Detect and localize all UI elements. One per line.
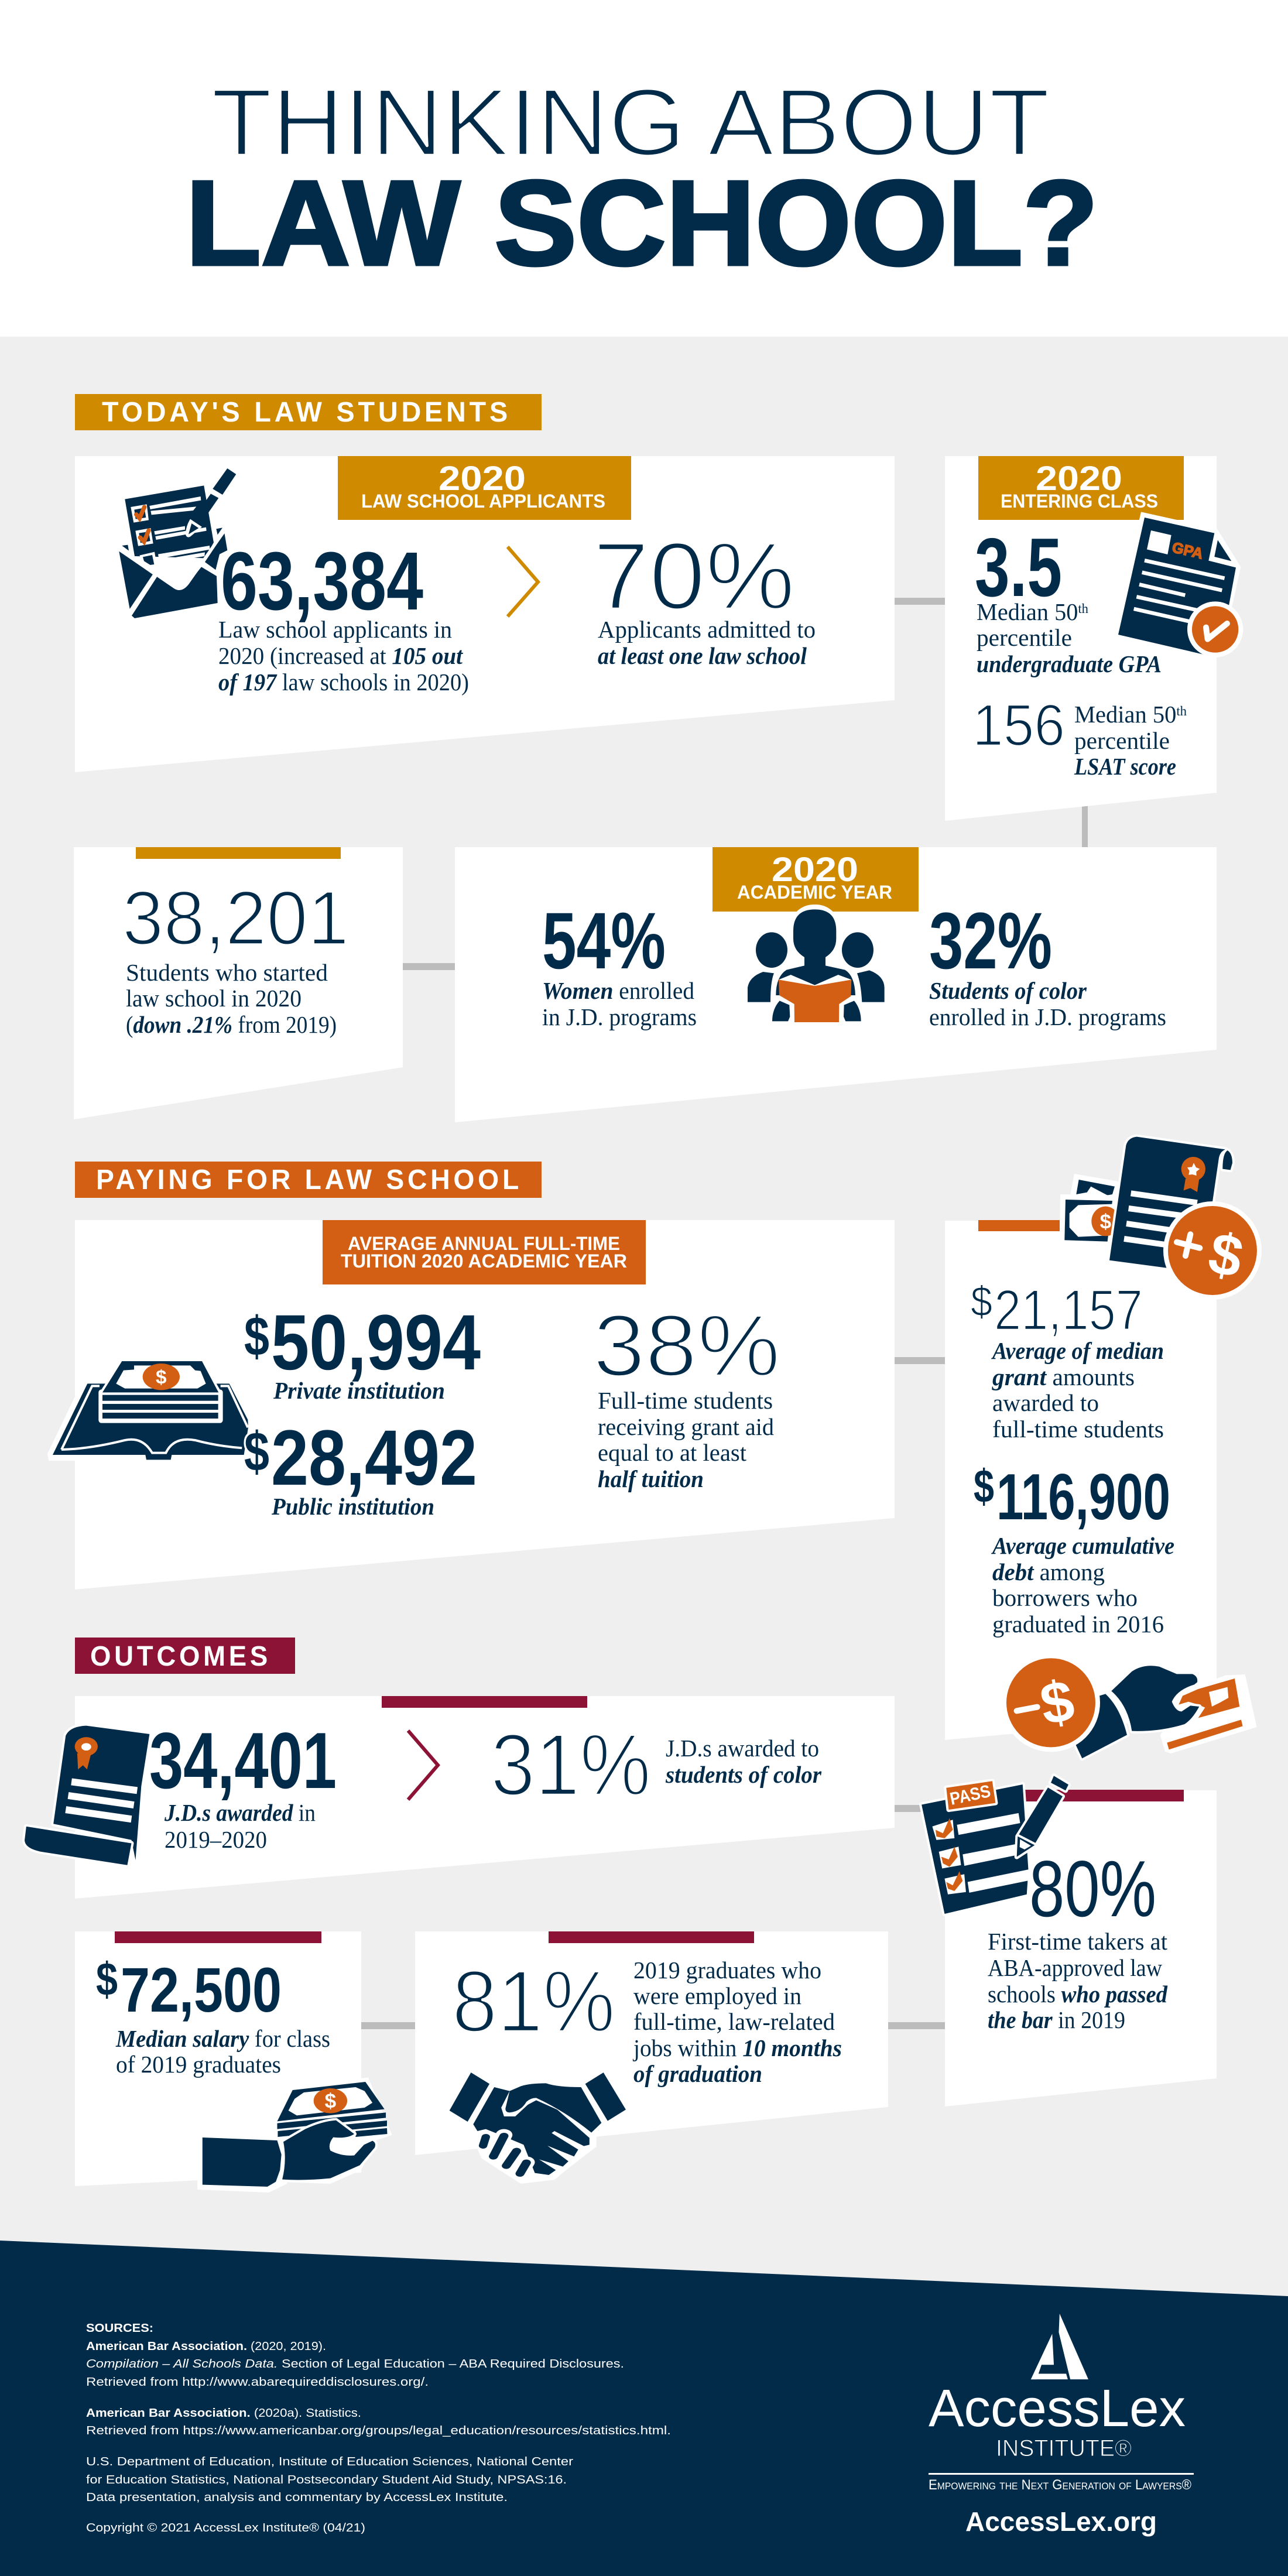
stat: 70% admitted: 70% <box>593 522 795 629</box>
sources text: SOURCES: <box>86 2322 153 2335</box>
panel: average annual tuition: AVERAGE ANNUAL FULL-TIME <box>348 1233 620 1254</box>
stat: 32% students of color <box>929 896 1166 1030</box>
stat: $116,900 debt: debt among <box>992 1558 1105 1585</box>
stat: 156 LSAT: LSAT score <box>1074 753 1176 780</box>
stat: 38% grant aid: receiving grant aid <box>598 1413 774 1440</box>
stat: $21,157 grant <box>971 1278 1164 1443</box>
panel: average annual tuition <box>47 1220 895 1590</box>
arrow: maroon chevron <box>408 1731 438 1800</box>
stat: 34,401 J.D.s: 2019–2020 <box>165 1826 267 1853</box>
sources text: Compilation – All Schools Data. Section of Legal Education – ABA Required Disclosures. <box>86 2358 624 2371</box>
panel: average annual tuition: TUITION 2020 ACADEMIC YEAR <box>341 1251 627 1272</box>
sources text: Retrieved from https://www.americanbar.org/groups/legal_education/resources/statistics.html. <box>86 2424 671 2437</box>
title <box>0 0 1288 337</box>
stat: 63,384 applicants: Law school applicants in <box>218 616 452 643</box>
stat: $21,157 grant: Average of median <box>991 1337 1164 1364</box>
title: THINKING ABOUT <box>211 68 1050 176</box>
stat: 80% passed: 80% <box>1029 1844 1156 1933</box>
stat: 54% women <box>542 896 697 1030</box>
sources text: Retrieved from http://www.abarequireddisclosures.org/. <box>86 2376 429 2389</box>
icon: book with money: $ <box>156 1366 167 1388</box>
stat: 38% grant aid: 38% <box>593 1296 780 1395</box>
stat: 34,401 J.D.s: 34,401 <box>149 1716 337 1805</box>
icon: hand paying with card and minus dollar coin <box>1002 1653 1257 1758</box>
stat: 3.5 GPA: undergraduate GPA <box>977 650 1162 677</box>
sources text: American Bar Association. (2020a). Statistics. <box>86 2407 361 2420</box>
stat: 3.5 GPA <box>975 521 1162 677</box>
icon: scroll and plus dollar coin <box>1060 1137 1262 1300</box>
stat: 31% students of color <box>491 1715 822 1814</box>
logo: AccessLex Institute <box>929 2314 1194 2537</box>
panel: 38,201 students: law school in 2020 <box>126 985 302 1012</box>
stat: 38% grant aid: equal to at least <box>598 1439 747 1466</box>
heading: outcomes: OUTCOMES <box>90 1641 271 1672</box>
icon: envelope and checklist <box>119 468 236 618</box>
stat: 3.5 GPA: th <box>1078 601 1088 616</box>
sources text: U.S. Department of Education, Institute of Education Sciences, National Center <box>86 2455 573 2468</box>
stat: private tuition <box>244 1299 481 1404</box>
stat: $21,157 grant: awarded to <box>992 1389 1099 1416</box>
stat: 34,401 J.D.s: J.D.s awarded in <box>164 1799 316 1826</box>
stat: public tuition: $ <box>244 1421 269 1483</box>
stat: 3.5 GPA: 3.5 <box>975 521 1062 614</box>
stat: 80% passed: the bar in 2019 <box>988 2006 1125 2033</box>
stat: 31% students of color: students of color <box>665 1761 822 1788</box>
stat: 81% employed: full-time, law-related <box>633 2008 835 2035</box>
icon: students reading <box>748 905 885 1022</box>
panel: 2020 law school applicants: 2020 <box>439 460 526 498</box>
stat: 81% employed: jobs within 10 months <box>632 2034 842 2061</box>
stat: $116,900 debt: Average cumulative <box>991 1532 1174 1559</box>
stat: 63,384 applicants: 63,384 <box>221 535 423 627</box>
stat: $21,157 grant: $ <box>971 1279 992 1325</box>
stat: 3.5 GPA: percentile <box>977 624 1072 651</box>
panel: 38,201 students: (down .21% from 2019) <box>126 1011 337 1038</box>
stat: $21,157 grant: full-time students <box>992 1416 1164 1443</box>
stat: $116,900 debt: $ <box>974 1460 994 1512</box>
stat: $21,157 grant: grant amounts <box>992 1364 1135 1390</box>
panel: 38,201 students: Students who started <box>126 959 328 986</box>
icon: hand holding cash <box>197 2077 392 2193</box>
panel: 2020 entering class: ENTERING CLASS <box>1001 491 1158 512</box>
stat: 3.5 GPA: Median 50 <box>977 598 1080 625</box>
stat: 54% women: 54% <box>542 896 666 986</box>
icon: pass checklist and pencil: PASS <box>948 1782 992 1809</box>
panel: 2020 law school applicants <box>75 456 895 772</box>
stat: public tuition: 28,492 <box>271 1414 477 1502</box>
panel: 2020 academic year: 2020 <box>772 851 858 889</box>
stat: $116,900 debt: graduated in 2016 <box>992 1611 1164 1638</box>
stat: 63,384 applicants: of 197 law schools in 2020) <box>218 669 469 696</box>
stat: $21,157 grant: 21,157 <box>994 1278 1143 1342</box>
stat: public tuition: Public institution <box>271 1493 434 1520</box>
stat: 80% passed <box>988 1844 1168 2033</box>
icon: hand holding cash: $ <box>325 2090 336 2113</box>
stat: private tuition: $ <box>244 1306 269 1368</box>
panel: 38,201 students: 38,201 <box>122 875 349 961</box>
stat: $72,500: 72,500 <box>121 1954 282 2025</box>
heading: paying for law school: PAYING FOR LAW SCHOOL <box>96 1164 522 1195</box>
stat: 38% grant aid: Full-time students <box>598 1387 773 1414</box>
stat: 63,384 applicants <box>218 535 469 696</box>
sources text: for Education Statistics, National Postsecondary Student Aid Study, NPSAS:16. <box>86 2474 567 2486</box>
icon: handshake <box>450 2073 626 2184</box>
stat: 81% employed: were employed in <box>633 1982 801 2009</box>
stat: public tuition <box>244 1414 477 1520</box>
panel: 2020 entering class <box>945 456 1243 821</box>
stat: 38% grant aid <box>593 1296 780 1492</box>
stat: $116,900 debt: 116,900 <box>996 1461 1170 1533</box>
heading: today's law students: TODAY'S LAW STUDENTS <box>102 397 511 428</box>
stat: 156 LSAT: Median 50 <box>1074 701 1178 728</box>
panel: median salary <box>75 1931 392 2193</box>
stat: 156 LSAT: percentile <box>1074 727 1170 754</box>
stat: 32% students of color: enrolled in J.D. programs <box>929 1003 1166 1030</box>
stat: $72,500 <box>96 1953 330 2078</box>
stat: 80% passed: ABA-approved law <box>988 1954 1162 1981</box>
stat: private tuition: Private institution <box>273 1377 445 1404</box>
panel: 2020 law school applicants: LAW SCHOOL APPLICANTS <box>361 491 605 512</box>
panel: 2020 academic year <box>455 847 1217 1122</box>
stat: 156 LSAT: 156 <box>972 693 1065 758</box>
icon: hand paying with card and minus dollar coin: $ <box>1036 1667 1079 1738</box>
title: LAW SCHOOL? <box>186 156 1098 290</box>
logo: AccessLex Institute: Empowering the Next Generation of Lawyers® <box>929 2477 1191 2493</box>
stat: 81% employed: of graduation <box>633 2060 762 2087</box>
stat: private tuition: 50,994 <box>271 1299 481 1386</box>
icon: pass checklist and pencil <box>922 1776 1068 1914</box>
stat: 32% students of color: 32% <box>929 896 1052 986</box>
stat: 31% students of color: 31% <box>491 1715 651 1814</box>
sources text: American Bar Association. (2020, 2019). <box>86 2340 326 2353</box>
icon: scroll and plus dollar coin: $ <box>1100 1210 1111 1233</box>
sources text: Copyright © 2021 AccessLex Institute® (04/21) <box>86 2522 365 2534</box>
sources text <box>86 2322 671 2534</box>
stat: 54% women: in J.D. programs <box>542 1003 697 1030</box>
panel: 2020 academic year: ACADEMIC YEAR <box>737 882 892 903</box>
stat: 32% students of color: Students of color <box>929 977 1087 1004</box>
stat: 54% women: Women enrolled <box>542 977 694 1004</box>
stat: 70% admitted <box>593 522 816 669</box>
icon: GPA document: GPA <box>1170 539 1205 563</box>
stat: 63,384 applicants: 2020 (increased at 105 out <box>218 642 464 669</box>
stat: 80% passed: schools who passed <box>988 1981 1167 2008</box>
stat: 31% students of color: J.D.s awarded to <box>666 1735 819 1762</box>
icon: book with money <box>47 1358 250 1461</box>
sources text: Data presentation, analysis and commentary by AccessLex Institute. <box>86 2491 508 2504</box>
stat: $72,500: Median salary for class <box>115 2025 330 2052</box>
stat: $116,900 debt: borrowers who <box>992 1584 1138 1611</box>
panel: 81% employed <box>415 1931 888 2184</box>
stat: 156 LSAT <box>972 693 1187 780</box>
footer band <box>0 2241 1288 2576</box>
panel: 38,201 students <box>74 847 403 1119</box>
stat: 81% employed: 2019 graduates who <box>633 1957 821 1984</box>
stat: $72,500: $ <box>96 1953 118 2005</box>
arrow: gold chevron <box>508 547 538 616</box>
panel: bar passage <box>922 1776 1217 2106</box>
stat: $72,500: of 2019 graduates <box>116 2051 281 2078</box>
panel: 2020 entering class: 2020 <box>1036 460 1122 498</box>
stat: 38% grant aid: half tuition <box>598 1465 704 1492</box>
stat: 34,401 J.D.s <box>149 1716 337 1853</box>
icon: GPA document <box>1112 512 1243 657</box>
logo: AccessLex Institute: AccessLex.org <box>965 2506 1157 2537</box>
logo: AccessLex Institute: AccessLex <box>929 2379 1186 2438</box>
stat: 81% employed <box>452 1952 842 2087</box>
stat: 81% employed: 81% <box>452 1952 615 2050</box>
stat: 156 LSAT: th <box>1176 704 1187 718</box>
logo: AccessLex Institute: INSTITUTE® <box>996 2435 1132 2461</box>
stat: $116,900 debt <box>974 1460 1174 1638</box>
stat: 70% admitted: at least one law school <box>598 642 807 669</box>
stat: 70% admitted: Applicants admitted to <box>598 616 816 643</box>
panel: grants and debt <box>945 1137 1262 1758</box>
icon: scroll and plus dollar coin: $ <box>1203 1220 1249 1291</box>
icon: diploma scroll <box>25 1726 149 1865</box>
panel: J.D.s awarded <box>25 1696 895 1899</box>
stat: 80% passed: First-time takers at <box>988 1928 1168 1955</box>
